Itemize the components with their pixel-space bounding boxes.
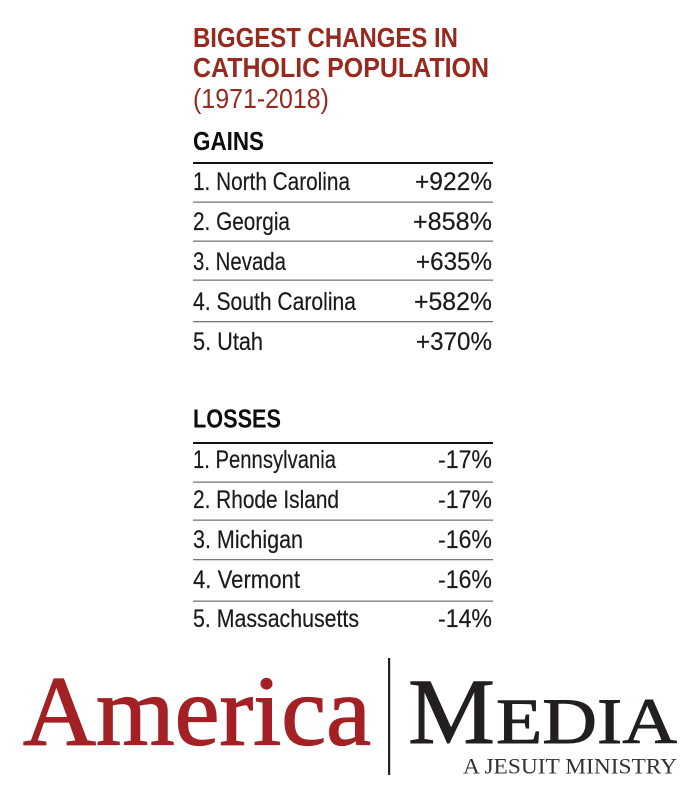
- row: Pennsylvania: -17%: [438, 446, 492, 474]
- row: Pennsylvania: 1. Pennsylvania: [193, 446, 336, 474]
- row: Vermont: -16%: [438, 566, 492, 594]
- title: (1971-2018): [193, 83, 329, 114]
- panel: gains: [193, 126, 493, 356]
- panel: losses: [193, 404, 493, 633]
- title: CATHOLIC POPULATION: [193, 52, 489, 83]
- logo wordmark: America: America: [23, 656, 371, 766]
- row: Michigan: -16%: [438, 526, 492, 554]
- title: BIGGEST CHANGES IN: [193, 22, 458, 53]
- logo tagline: A JESUIT MINISTRY: [463, 754, 677, 778]
- row: North Carolina: 1. North Carolina: [193, 168, 350, 196]
- row: North Carolina: [193, 168, 492, 196]
- row: Georgia: [193, 208, 492, 236]
- row: Rhode Island: 2. Rhode Island: [193, 486, 339, 514]
- row: Nevada: +635%: [416, 248, 492, 276]
- row: Nevada: 3. Nevada: [193, 248, 286, 276]
- logo wordmark: Media: EDIA: [496, 686, 677, 758]
- row: Utah: [193, 328, 492, 356]
- row: Pennsylvania: [193, 446, 492, 474]
- row: Massachusetts: [193, 605, 492, 633]
- heading: losses: LOSSES: [193, 404, 281, 434]
- row: South Carolina: +582%: [414, 288, 492, 316]
- row: Rhode Island: -17%: [438, 486, 492, 514]
- heading: gains: GAINS: [193, 126, 264, 156]
- row: South Carolina: [193, 288, 492, 316]
- row: Vermont: [193, 566, 492, 594]
- row: Massachusetts: 5. Massachusetts: [193, 605, 359, 633]
- row: Vermont: 4. Vermont: [193, 566, 300, 594]
- row: Michigan: [193, 526, 492, 554]
- row: Georgia: 2. Georgia: [193, 208, 290, 236]
- row: Massachusetts: -14%: [438, 605, 492, 633]
- row: Utah: +370%: [416, 328, 492, 356]
- row: Utah: 5. Utah: [193, 328, 263, 356]
- row: Michigan: 3. Michigan: [193, 526, 303, 554]
- logo wordmark: Media: M: [408, 661, 495, 764]
- row: Rhode Island: [193, 486, 492, 514]
- row: Georgia: +858%: [413, 208, 492, 236]
- logo: America Media: [23, 656, 677, 778]
- row: South Carolina: 4. South Carolina: [193, 288, 356, 316]
- row: North Carolina: +922%: [415, 168, 492, 196]
- logo wordmark: Media: [408, 661, 677, 764]
- title: [193, 22, 489, 114]
- row: Nevada: [193, 248, 492, 276]
